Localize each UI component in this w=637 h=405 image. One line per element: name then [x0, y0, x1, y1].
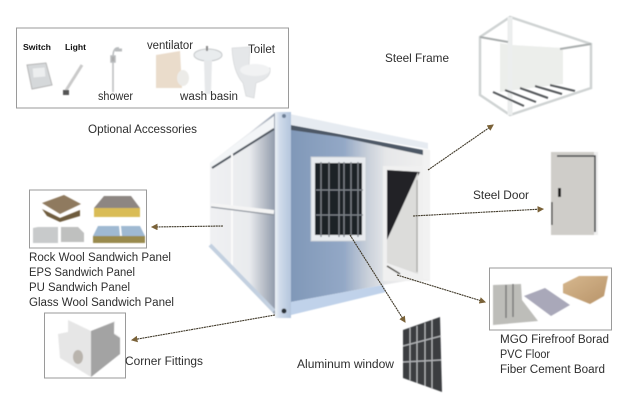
label: steel frame: Steel Frame: [385, 51, 449, 65]
panel: floor boards: [490, 268, 612, 330]
icon: wash basin: [194, 46, 222, 94]
illustration: steel frame: [480, 17, 591, 115]
arrow: floor: [397, 275, 485, 302]
swatch: pu: [33, 227, 84, 243]
illustration: steel door: [551, 152, 598, 235]
arrow: steel frame: [428, 125, 493, 170]
arrow: corner fittings: [132, 315, 275, 340]
text: sandwich panel list: [29, 252, 174, 309]
icon: light: [63, 65, 82, 95]
right post: [423, 149, 430, 280]
icon: ventilator: [156, 51, 189, 88]
text: floor list: PVC Floor: [500, 349, 550, 361]
label: steel door: Steel Door: [473, 188, 529, 202]
illustration: aluminum window: [403, 317, 442, 392]
swatch: glass wool: [93, 226, 145, 243]
text: floor list: [500, 334, 609, 376]
front wall: [291, 125, 423, 302]
swatch: rock wool: [42, 195, 81, 222]
panel: sandwich panels: [30, 190, 146, 248]
swatch: mgo board: [493, 284, 538, 325]
label: toilet: Toilet: [248, 44, 276, 56]
icon: switch: [27, 63, 52, 89]
label: corner fittings: Corner Fittings: [125, 356, 203, 368]
panel: corner fittings: [44, 313, 126, 378]
arrow: sandwich panels: [152, 226, 223, 227]
text: sandwich panel list: EPS Sandwich Panel: [29, 267, 135, 279]
top beam: [280, 112, 428, 149]
corner post: [275, 112, 291, 318]
text: floor list: MGO Firefroof Borad: [500, 334, 609, 346]
text: floor list: Fiber Cement Board: [500, 364, 605, 376]
label: aluminum window: Aluminum window: [297, 359, 395, 371]
swatch: pvc floor: [524, 288, 570, 316]
label: light: Light: [65, 42, 86, 52]
swatch: fiber cement: [563, 276, 608, 304]
panel: optional accessories: [16, 28, 288, 108]
icon: shower: [111, 48, 122, 92]
arrows: [132, 125, 543, 340]
text: sandwich panel list: PU Sandwich Panel: [29, 282, 130, 294]
label: ventilator: ventilator: [147, 40, 193, 52]
arrow: steel door: [413, 209, 543, 216]
side wall: [210, 112, 276, 316]
label: switch: Switch: [23, 42, 51, 52]
text: sandwich panel list: Glass Wool Sandwich Panel: [29, 297, 174, 309]
label: wash basin: wash basin: [179, 91, 238, 103]
text: sandwich panel list: Rock Wool Sandwich Panel: [29, 252, 171, 264]
label: shower: shower: [98, 91, 133, 103]
door opening: [383, 166, 430, 281]
heading: optional accessories: Optional Accessories: [88, 122, 197, 136]
icon: toilet: [232, 47, 270, 98]
arrow: aluminum window: [350, 235, 405, 322]
window: [311, 157, 366, 241]
main container house: [210, 112, 430, 318]
swatch: eps: [94, 196, 140, 217]
icon: corner fitting: [58, 320, 120, 377]
bottom beam: [291, 285, 386, 315]
